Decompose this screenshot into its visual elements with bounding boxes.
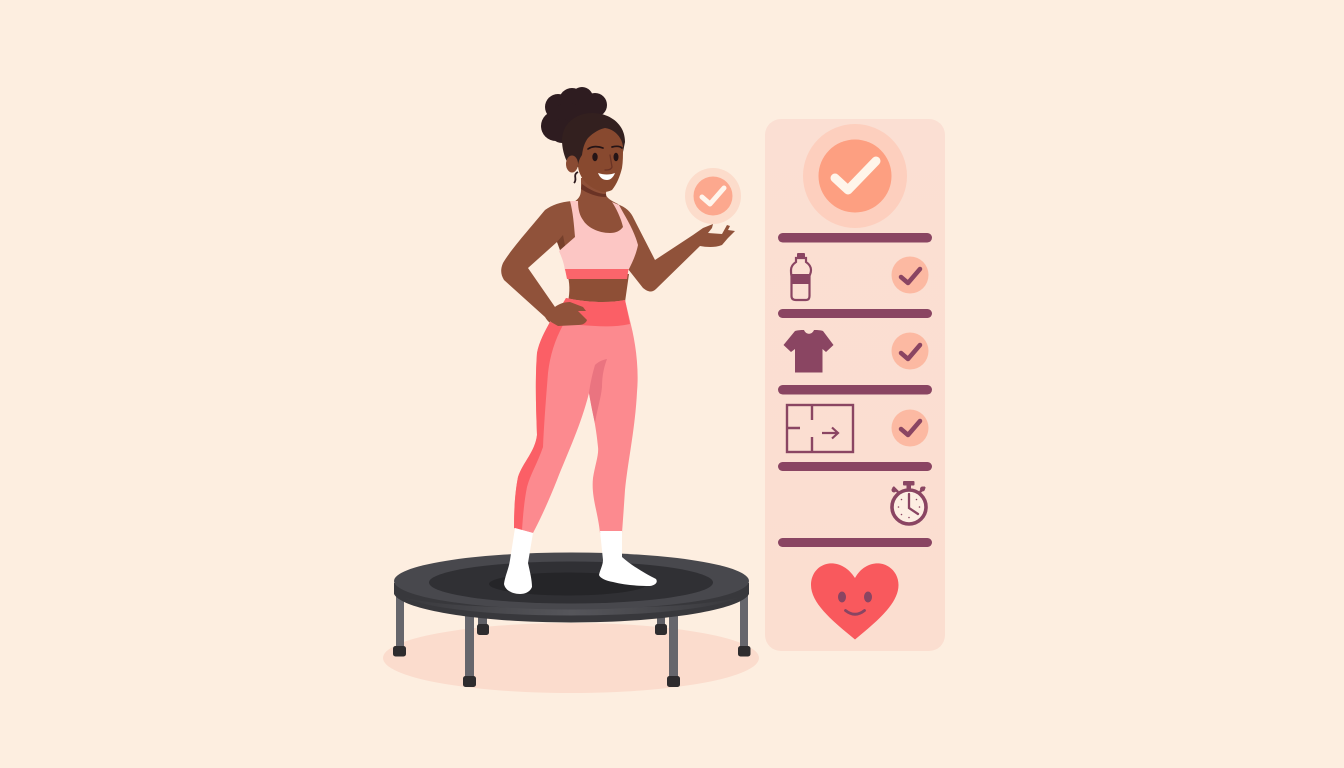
icon: t-shirt	[784, 330, 834, 372]
icon: floor plan with arrow	[787, 405, 853, 452]
floor shadow	[383, 623, 759, 693]
panel: checklist	[765, 119, 945, 651]
torso upper and neck	[572, 178, 628, 245]
check: shirt	[892, 332, 928, 370]
main check badge	[803, 124, 907, 228]
leggings side stripe	[514, 322, 563, 530]
icon: stopwatch	[892, 481, 926, 524]
armpit shadow	[557, 235, 566, 253]
hair bun	[541, 87, 607, 143]
neck shadow	[581, 184, 606, 197]
floating check badge	[685, 168, 741, 224]
waistband	[553, 298, 630, 326]
check: bottle	[892, 256, 928, 294]
eyes and brows	[588, 146, 622, 170]
trampoline	[393, 552, 750, 687]
sports bra	[559, 201, 638, 271]
leggings	[514, 298, 638, 533]
right arm raised	[617, 204, 735, 292]
left arm on hip	[501, 201, 587, 325]
trampoline legs	[393, 590, 750, 687]
trampoline mat	[429, 562, 713, 604]
hair cap	[562, 113, 625, 168]
trampoline rim	[394, 552, 749, 610]
trampoline frame side	[394, 583, 749, 622]
bra band	[565, 269, 628, 279]
inner thigh shadow	[589, 359, 607, 423]
ear and earring	[566, 156, 578, 183]
woman	[501, 87, 735, 594]
icon: smiling heart	[811, 563, 898, 640]
midriff	[567, 274, 629, 302]
divider bars	[778, 233, 932, 547]
check: floor plan	[892, 410, 928, 446]
face	[578, 128, 623, 192]
icon: water bottle	[791, 253, 811, 300]
right sock	[599, 531, 657, 586]
smile	[598, 173, 615, 180]
left sock	[504, 528, 533, 594]
hip hand	[550, 302, 587, 326]
